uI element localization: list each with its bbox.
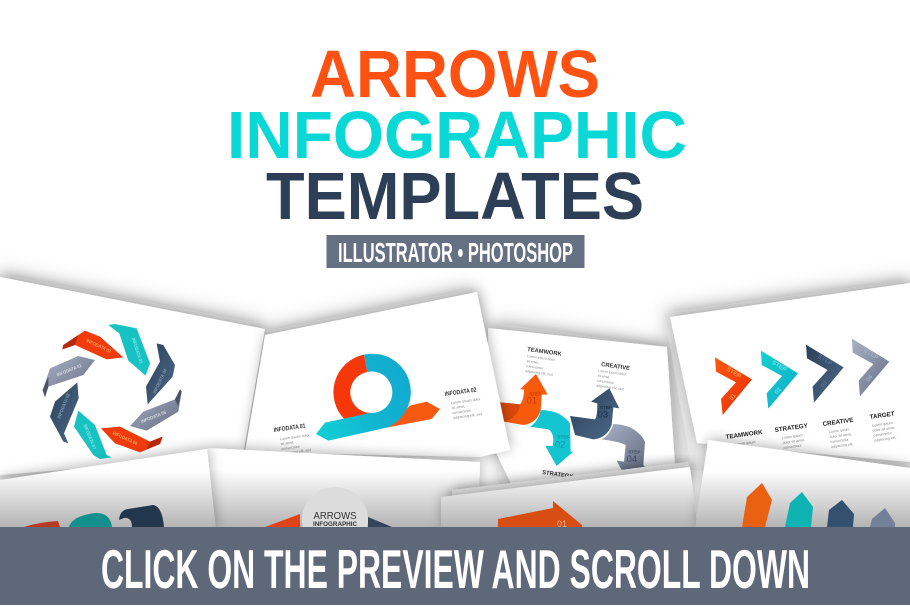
label: infodata 01: INFODATA 01 [273, 423, 306, 434]
label: creative [822, 417, 857, 450]
cover badge: INFOGRAPHIC [313, 522, 358, 528]
step arrows: STEP [600, 405, 612, 410]
step arrows [500, 374, 645, 470]
chevrons [715, 339, 889, 415]
label: target [869, 411, 898, 443]
label: teamwork: Lorem ipsum dolor [527, 354, 556, 362]
step arrows: 01 [527, 395, 537, 405]
label: infodata 01 [273, 422, 313, 457]
label: target: dolor sit amet, [872, 426, 895, 433]
arrow 01: 01 [557, 519, 567, 529]
label: infodata 02: sit amet, [451, 404, 466, 410]
label: teamwork: consectetur [526, 364, 544, 371]
label: infodata 01: Lorem ipsum dolor [280, 433, 311, 441]
label: infodata 02: adipiscing elit, sed [453, 412, 483, 420]
chevrons: STEP [862, 348, 879, 362]
arrow ring: INFODATA 05 [140, 409, 167, 424]
label: infodata 01: consectetur [281, 444, 301, 451]
chevrons: STEP [771, 360, 787, 373]
step arrows: STEP [557, 435, 569, 440]
label: creative: dolor sit amet, [829, 432, 852, 439]
chevrons: 04 [865, 374, 875, 383]
cover badge: ARROWS [314, 511, 357, 522]
title: INFOGRAPHIC [227, 98, 687, 173]
label: teamwork: sit amet, [526, 359, 540, 365]
slide: ring of arrows [0, 277, 265, 475]
arrow ring: INFODATA 03 [131, 337, 144, 364]
step arrows: 02 [555, 439, 565, 449]
arrow ring: INFODATA 04 [152, 368, 168, 394]
step arrows: 03 [598, 409, 608, 419]
loop arrow graphic [316, 354, 440, 441]
label: strategy [774, 422, 811, 451]
label: creative [596, 362, 630, 392]
label: target: Lorem ipsum [872, 421, 893, 428]
label: target: consectetur [873, 431, 893, 438]
label: target: adipiscing elit, [874, 436, 897, 443]
label: teamwork: TEAMWORK [527, 347, 563, 358]
slide: bottom centre-right arrow [441, 462, 698, 530]
tag arrows [742, 483, 895, 527]
label: target: TARGET [869, 411, 895, 421]
label: teamwork: adipiscing elit, sed [525, 369, 553, 377]
slide: circular loop arrow [245, 292, 510, 457]
step arrows: 04 [627, 454, 637, 464]
label: creative: CREATIVE [822, 417, 854, 428]
label: creative: CREATIVE [601, 362, 630, 372]
slide: chevron steps [670, 283, 910, 462]
label: strategy: consectetur [783, 443, 803, 450]
label: creative: Lorem ipsum [829, 427, 850, 434]
cover badge [265, 487, 392, 553]
label: creative: sit amet, [597, 374, 611, 379]
subtitle badge: ILLUSTRATOR • PHOTOSHOP [338, 237, 573, 268]
label: infodata 02: consectetur [452, 408, 472, 415]
arrow ring: INFODATA 02 [86, 338, 112, 354]
step arrows: STEP [628, 449, 640, 454]
step arrows: STEP [529, 391, 542, 396]
label: infodata 01: adipiscing elit, sed [282, 448, 312, 456]
label: teamwork: TEAMWORK [725, 429, 764, 441]
subtitle badge [326, 235, 584, 268]
title [227, 37, 687, 234]
slide: twisted step arrows [488, 328, 675, 486]
label: teamwork [524, 347, 563, 378]
chevrons: STEP [725, 367, 742, 380]
label: strategy: STRATEGY [542, 470, 574, 480]
label: creative: consectetur [830, 437, 850, 444]
title: ARROWS [310, 37, 600, 112]
label: infodata 02 [444, 386, 484, 421]
label: creative: Lorem ipsum dolor [598, 369, 627, 377]
slide: bottom centre circle [207, 448, 480, 553]
label: infodata 02: INFODATA 02 [444, 387, 477, 398]
label: infodata 01: sit amet, [280, 440, 295, 446]
slide: bottom right tag arrows [695, 440, 910, 530]
chevrons: 03 [820, 380, 829, 389]
arrow ring: INFODATA 01 [56, 363, 83, 378]
chevrons: 02 [774, 386, 783, 396]
arrow ring: INFODATA 06 [112, 430, 139, 446]
label: creative: consectetur [597, 379, 615, 385]
background paper layers [0, 274, 910, 490]
chevrons: STEP [816, 354, 833, 367]
label: strategy: STRATEGY [774, 422, 809, 434]
arrow ring [43, 324, 182, 459]
label: strategy: dolor sit amet, [782, 438, 805, 445]
ribbons [24, 505, 164, 527]
label: creative: adipiscing elit, [831, 442, 854, 449]
label: infodata 02: Lorem ipsum dolor [451, 397, 482, 405]
slide: bottom left ribbons [0, 449, 216, 530]
arrow ring: INFODATA 07 [82, 423, 97, 450]
label: strategy: Lorem ipsum [782, 433, 803, 440]
arrow 01 [498, 501, 582, 529]
label: teamwork: Lorem ipsum [735, 440, 756, 447]
chevrons: 01 [729, 392, 738, 402]
title: TEMPLATES [266, 159, 644, 234]
arrow ring: INFODATA 08 [56, 392, 71, 419]
label: teamwork [725, 429, 765, 448]
label: creative: adipiscing elit, sed [596, 384, 624, 391]
